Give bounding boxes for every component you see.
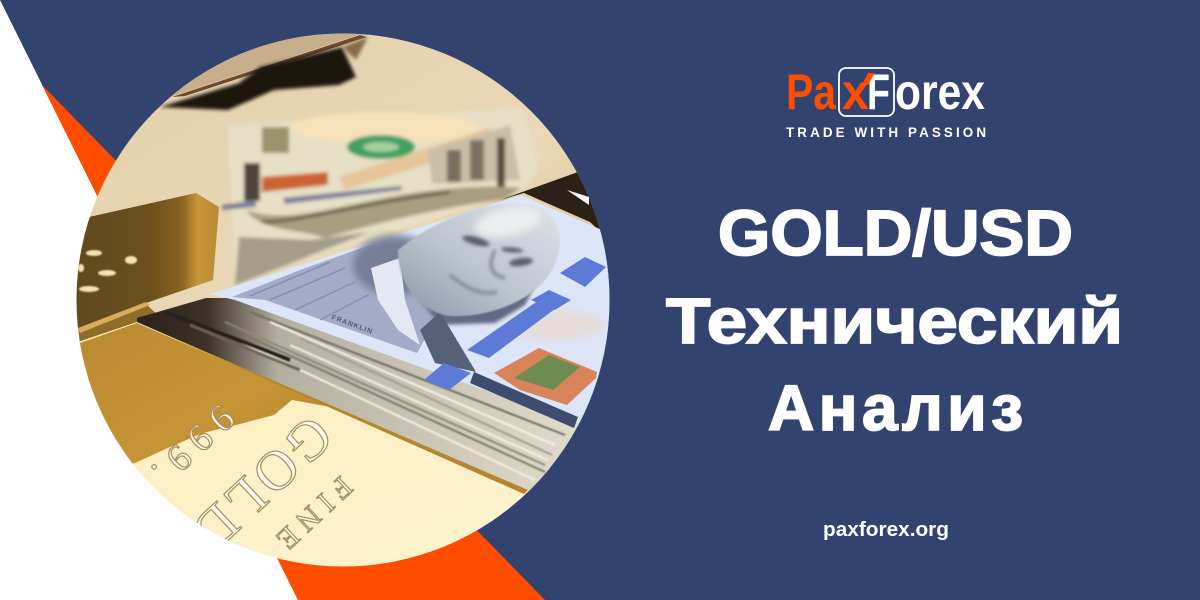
- gold shadow line: [137, 320, 530, 494]
- brows and eyes: [461, 234, 533, 268]
- cream lit surface: [80, 322, 550, 566]
- website url: paxforex.org: [823, 519, 949, 541]
- front hundred dollar bill: [210, 195, 610, 428]
- big gold bar: [78, 302, 550, 566]
- oval light area: [290, 112, 480, 144]
- lower hatch: [235, 232, 370, 285]
- bill paper: [210, 195, 610, 424]
- orange accent triangle: [42, 85, 545, 600]
- wordmark orange part: Pa: [786, 64, 837, 120]
- engraved wave: [246, 187, 521, 238]
- beige gold reflection: [70, 30, 615, 360]
- forehead highlight: [472, 206, 542, 240]
- engraved FINE GOLD 999.9 lettering: 999.9: [115, 396, 243, 520]
- FRANKLIN caption: FRANKLIN: [330, 314, 374, 336]
- neck shadow: [420, 285, 535, 325]
- portrait coat: [232, 245, 440, 353]
- white corner triangle: [0, 0, 298, 600]
- face: [398, 203, 560, 316]
- wordmark white part: orex: [895, 64, 985, 120]
- headline line 3: Анализ: [768, 372, 1023, 444]
- headline: [666, 197, 1123, 444]
- headline line 1: GOLD/USD: [718, 197, 1073, 269]
- circular photo: gold bars and dollar bills: [76, 34, 610, 566]
- engraved FINE GOLD 999.9 lettering: GOLD: [177, 403, 344, 566]
- thin bar edge: [78, 306, 156, 351]
- tagline: TRADE WITH PASSION: [786, 125, 986, 140]
- logo F: F: [867, 64, 890, 120]
- PaxForex logo: [786, 64, 986, 140]
- logo frame: [839, 68, 894, 116]
- copper bell: [494, 348, 597, 405]
- logo slash: [862, 73, 875, 85]
- top gold bar edge: [150, 30, 368, 110]
- peach background lines: [505, 311, 605, 339]
- orange label: [262, 172, 328, 192]
- purple stripe: [283, 186, 402, 204]
- logo x: x: [842, 64, 869, 120]
- white collar: [371, 258, 420, 345]
- peach band: [339, 128, 495, 190]
- dark gap and corner behind the bill: [500, 172, 604, 235]
- blue security stripes: [424, 257, 606, 390]
- green bell inside: [514, 355, 580, 390]
- hair: [353, 235, 437, 295]
- dark strip along bill bottom: [470, 372, 578, 428]
- coat shading lines: [250, 262, 368, 320]
- nose and mouth shading: [450, 250, 505, 293]
- small gold bar: [66, 193, 219, 334]
- dark gold surface: [80, 323, 327, 464]
- blurred dollar bill reflection: [222, 108, 539, 285]
- stack of banknote edges: [137, 298, 579, 490]
- green seal: [347, 135, 415, 159]
- engraved FINE GOLD 999.9 lettering: FINE: [264, 470, 359, 561]
- dark coat fold: [420, 312, 476, 372]
- engraved sparkles: [78, 250, 137, 292]
- building columns: [428, 125, 520, 184]
- dark block: [244, 163, 260, 201]
- grid stamp: [262, 127, 289, 153]
- headline line 2: Технический: [666, 285, 1123, 357]
- pale banknote: [228, 108, 539, 280]
